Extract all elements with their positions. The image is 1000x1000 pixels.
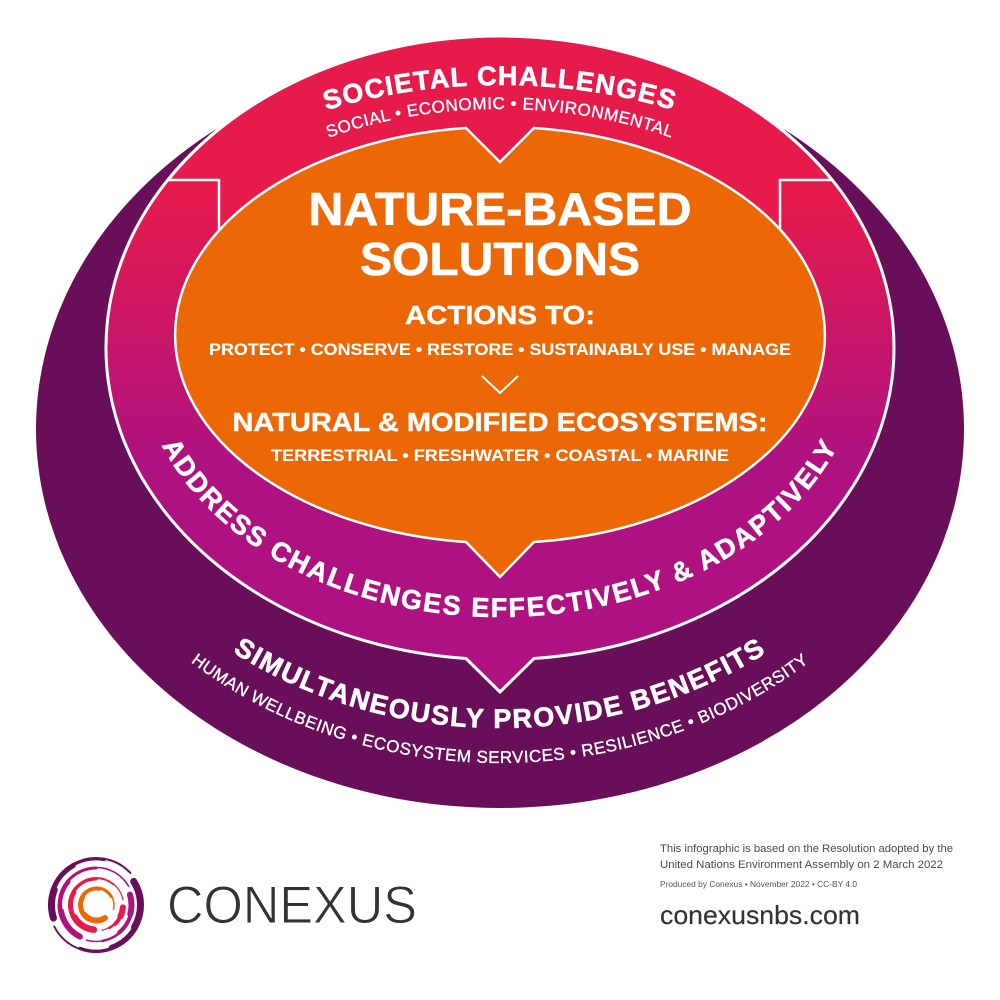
heading: natural and modified ecosystems: NATURAL & MODIFIED ECOSYSTEMS: [232,407,768,437]
top band: societal challenges [168,36,832,260]
title: nature-based solutions [308,183,692,285]
tab outline left [168,180,219,230]
list of actions: PROTECT • CONSERVE • RESTORE • SUSTAINABLY USE • MANAGE [209,341,791,359]
source note: United Nations Environment Assembly on 2 March 2022 [660,859,943,871]
source note: This infographic is based on the Resolution adopted by the [660,843,953,855]
website: conexusnbs.com [660,900,860,930]
subheading: social economic environmental: SOCIAL • ECONOMIC • ENVIRONMENTAL [326,97,672,138]
central orange shape [175,128,825,577]
icon: chevron down [482,376,518,393]
middle ellipse: societal challenges and address challenges [106,36,894,692]
list of ecosystems: TERRESTRIAL • FRESHWATER • COASTAL • MARINE [271,447,729,465]
curved subheading: benefits list: HUMAN WELLBEING • ECOSYSTEM SERVICES • RESILIENCE • BIODIVERSITY [192,652,806,764]
logo icon [33,842,159,968]
heading: societal challenges: SOCIETAL CHALLENGES [323,66,676,109]
source note [660,843,953,871]
production credit: Produced by Conexus • November 2022 • CC-BY 4.0 [660,880,858,889]
top band outline [168,36,832,180]
heading: actions to: ACTIONS TO: [405,300,595,330]
title: nature-based solutions: SOLUTIONS [360,233,640,285]
curved heading: address challenges: ADDRESS CHALLENGES EFFECTIVELY & ADAPTIVELY [162,438,834,618]
title: nature-based solutions: NATURE-BASED [308,183,692,235]
curved heading: simultaneously provide benefits: SIMULTANEOUSLY PROVIDE BENEFITS [235,638,764,728]
logo wordmark: CONEXUS [167,876,417,935]
tab outline right [780,180,832,230]
outer ellipse: benefits [36,50,964,808]
